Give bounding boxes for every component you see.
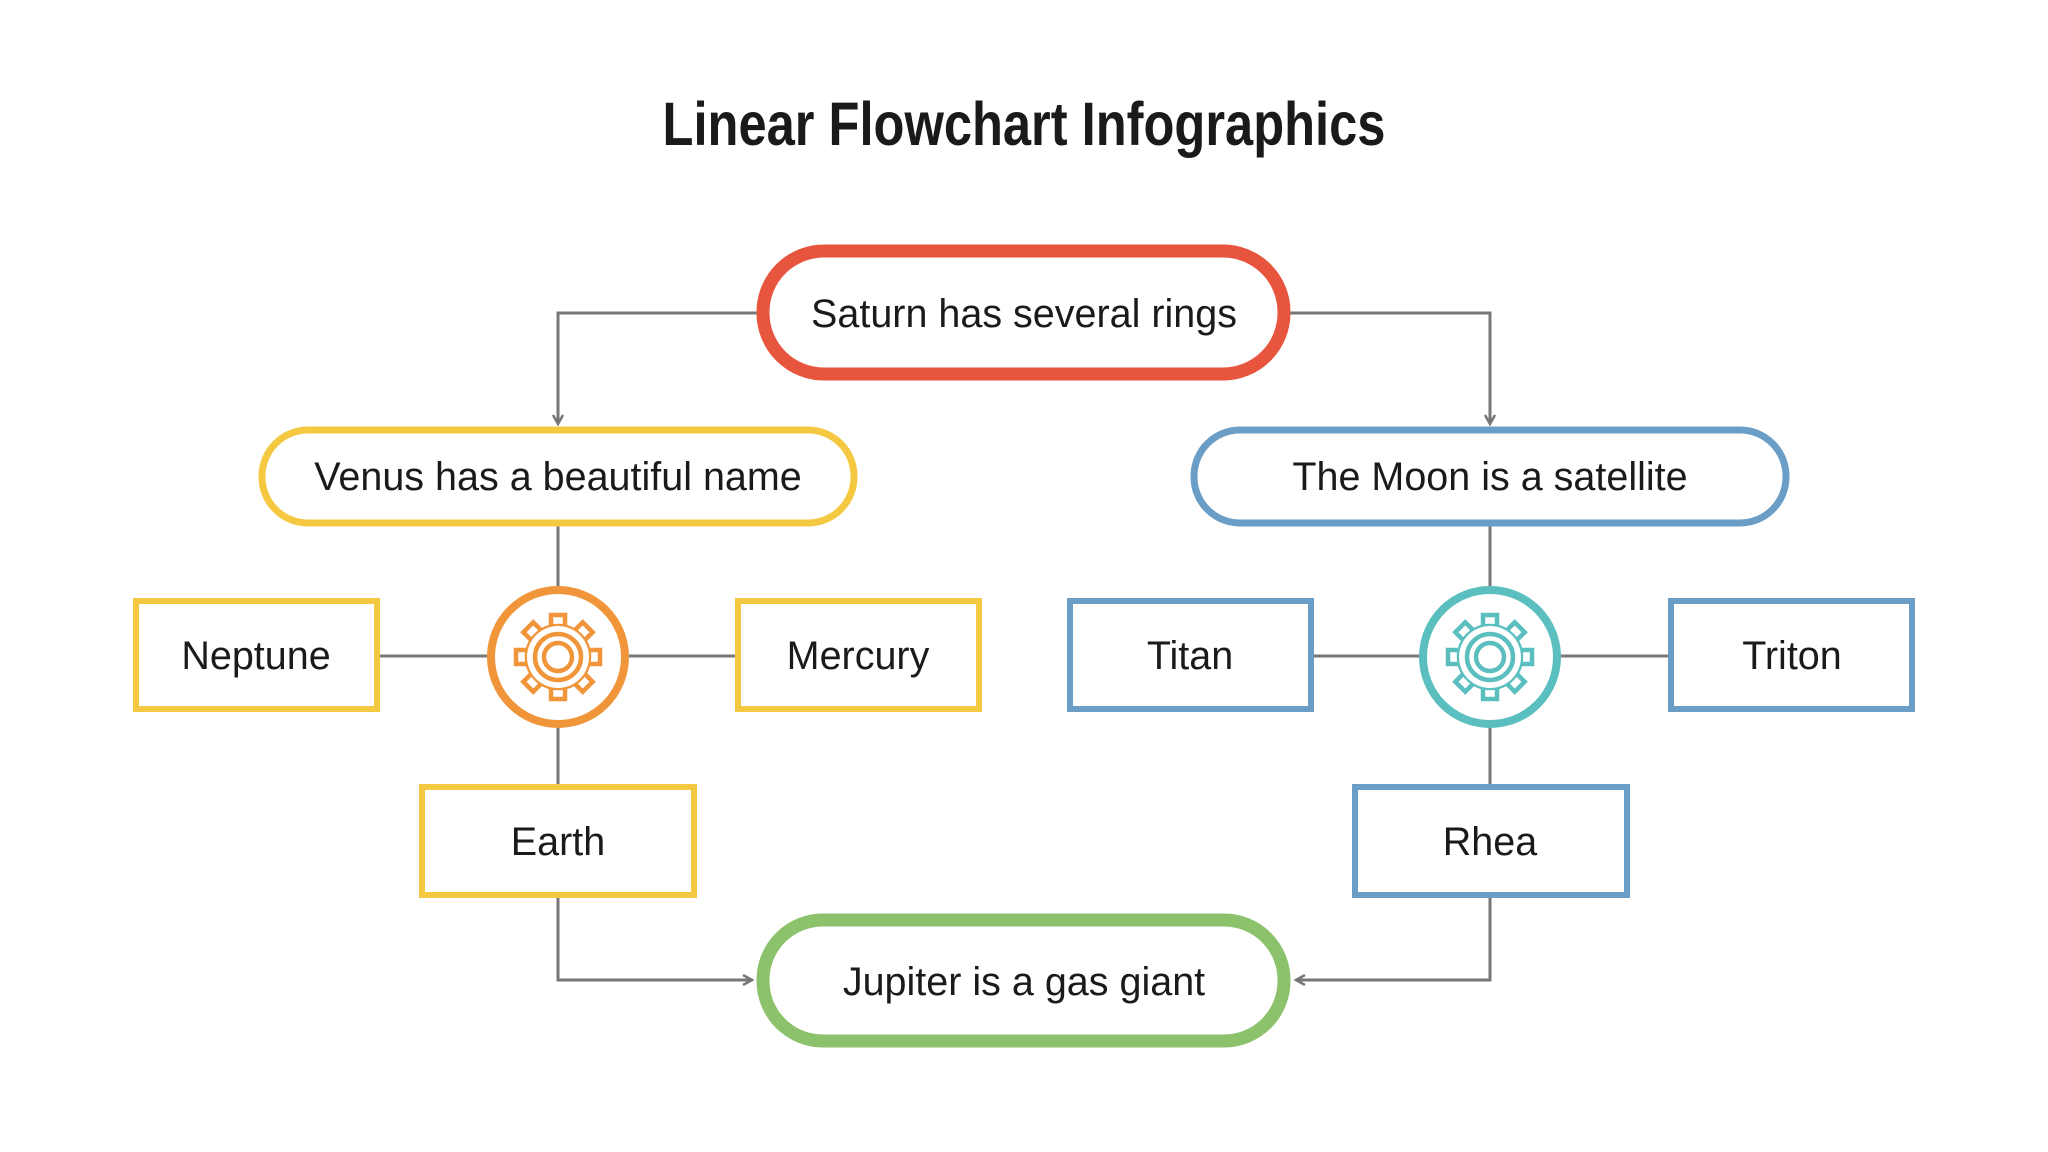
box: mercury	[738, 601, 979, 709]
box: neptune	[136, 601, 377, 709]
pill: moon: The Moon is a satellite	[1292, 455, 1688, 499]
box: rhea: Rhea	[1443, 820, 1537, 864]
connectors: right cluster	[1313, 526, 1668, 784]
pill: saturn: Saturn has several rings	[811, 292, 1237, 336]
arrow: rhea to jupiter	[1296, 897, 1490, 980]
box: triton	[1671, 601, 1912, 709]
box: titan: Titan	[1147, 634, 1233, 678]
icon: orange gear	[491, 590, 625, 724]
connectors: left cluster	[380, 526, 735, 784]
box: earth	[422, 787, 694, 895]
box: triton: Triton	[1742, 634, 1842, 678]
pill: jupiter	[763, 920, 1284, 1041]
icon: teal gear	[1423, 590, 1557, 724]
arrow: earth to jupiter	[558, 897, 752, 980]
arrow: saturn to moon	[1290, 313, 1490, 424]
box: rhea	[1355, 787, 1627, 895]
arrow: saturn to venus	[558, 313, 757, 424]
box: neptune: Neptune	[181, 634, 331, 678]
pill: venus: Venus has a beautiful name	[314, 455, 802, 499]
box: titan	[1070, 601, 1311, 709]
title: Linear Flowchart Infographics	[663, 90, 1385, 158]
box: mercury: Mercury	[787, 634, 930, 678]
pill: moon	[1194, 430, 1786, 523]
pill: saturn	[763, 251, 1284, 374]
pill: venus	[262, 430, 854, 523]
box: earth: Earth	[511, 820, 605, 864]
pill: jupiter: Jupiter is a gas giant	[843, 960, 1205, 1004]
